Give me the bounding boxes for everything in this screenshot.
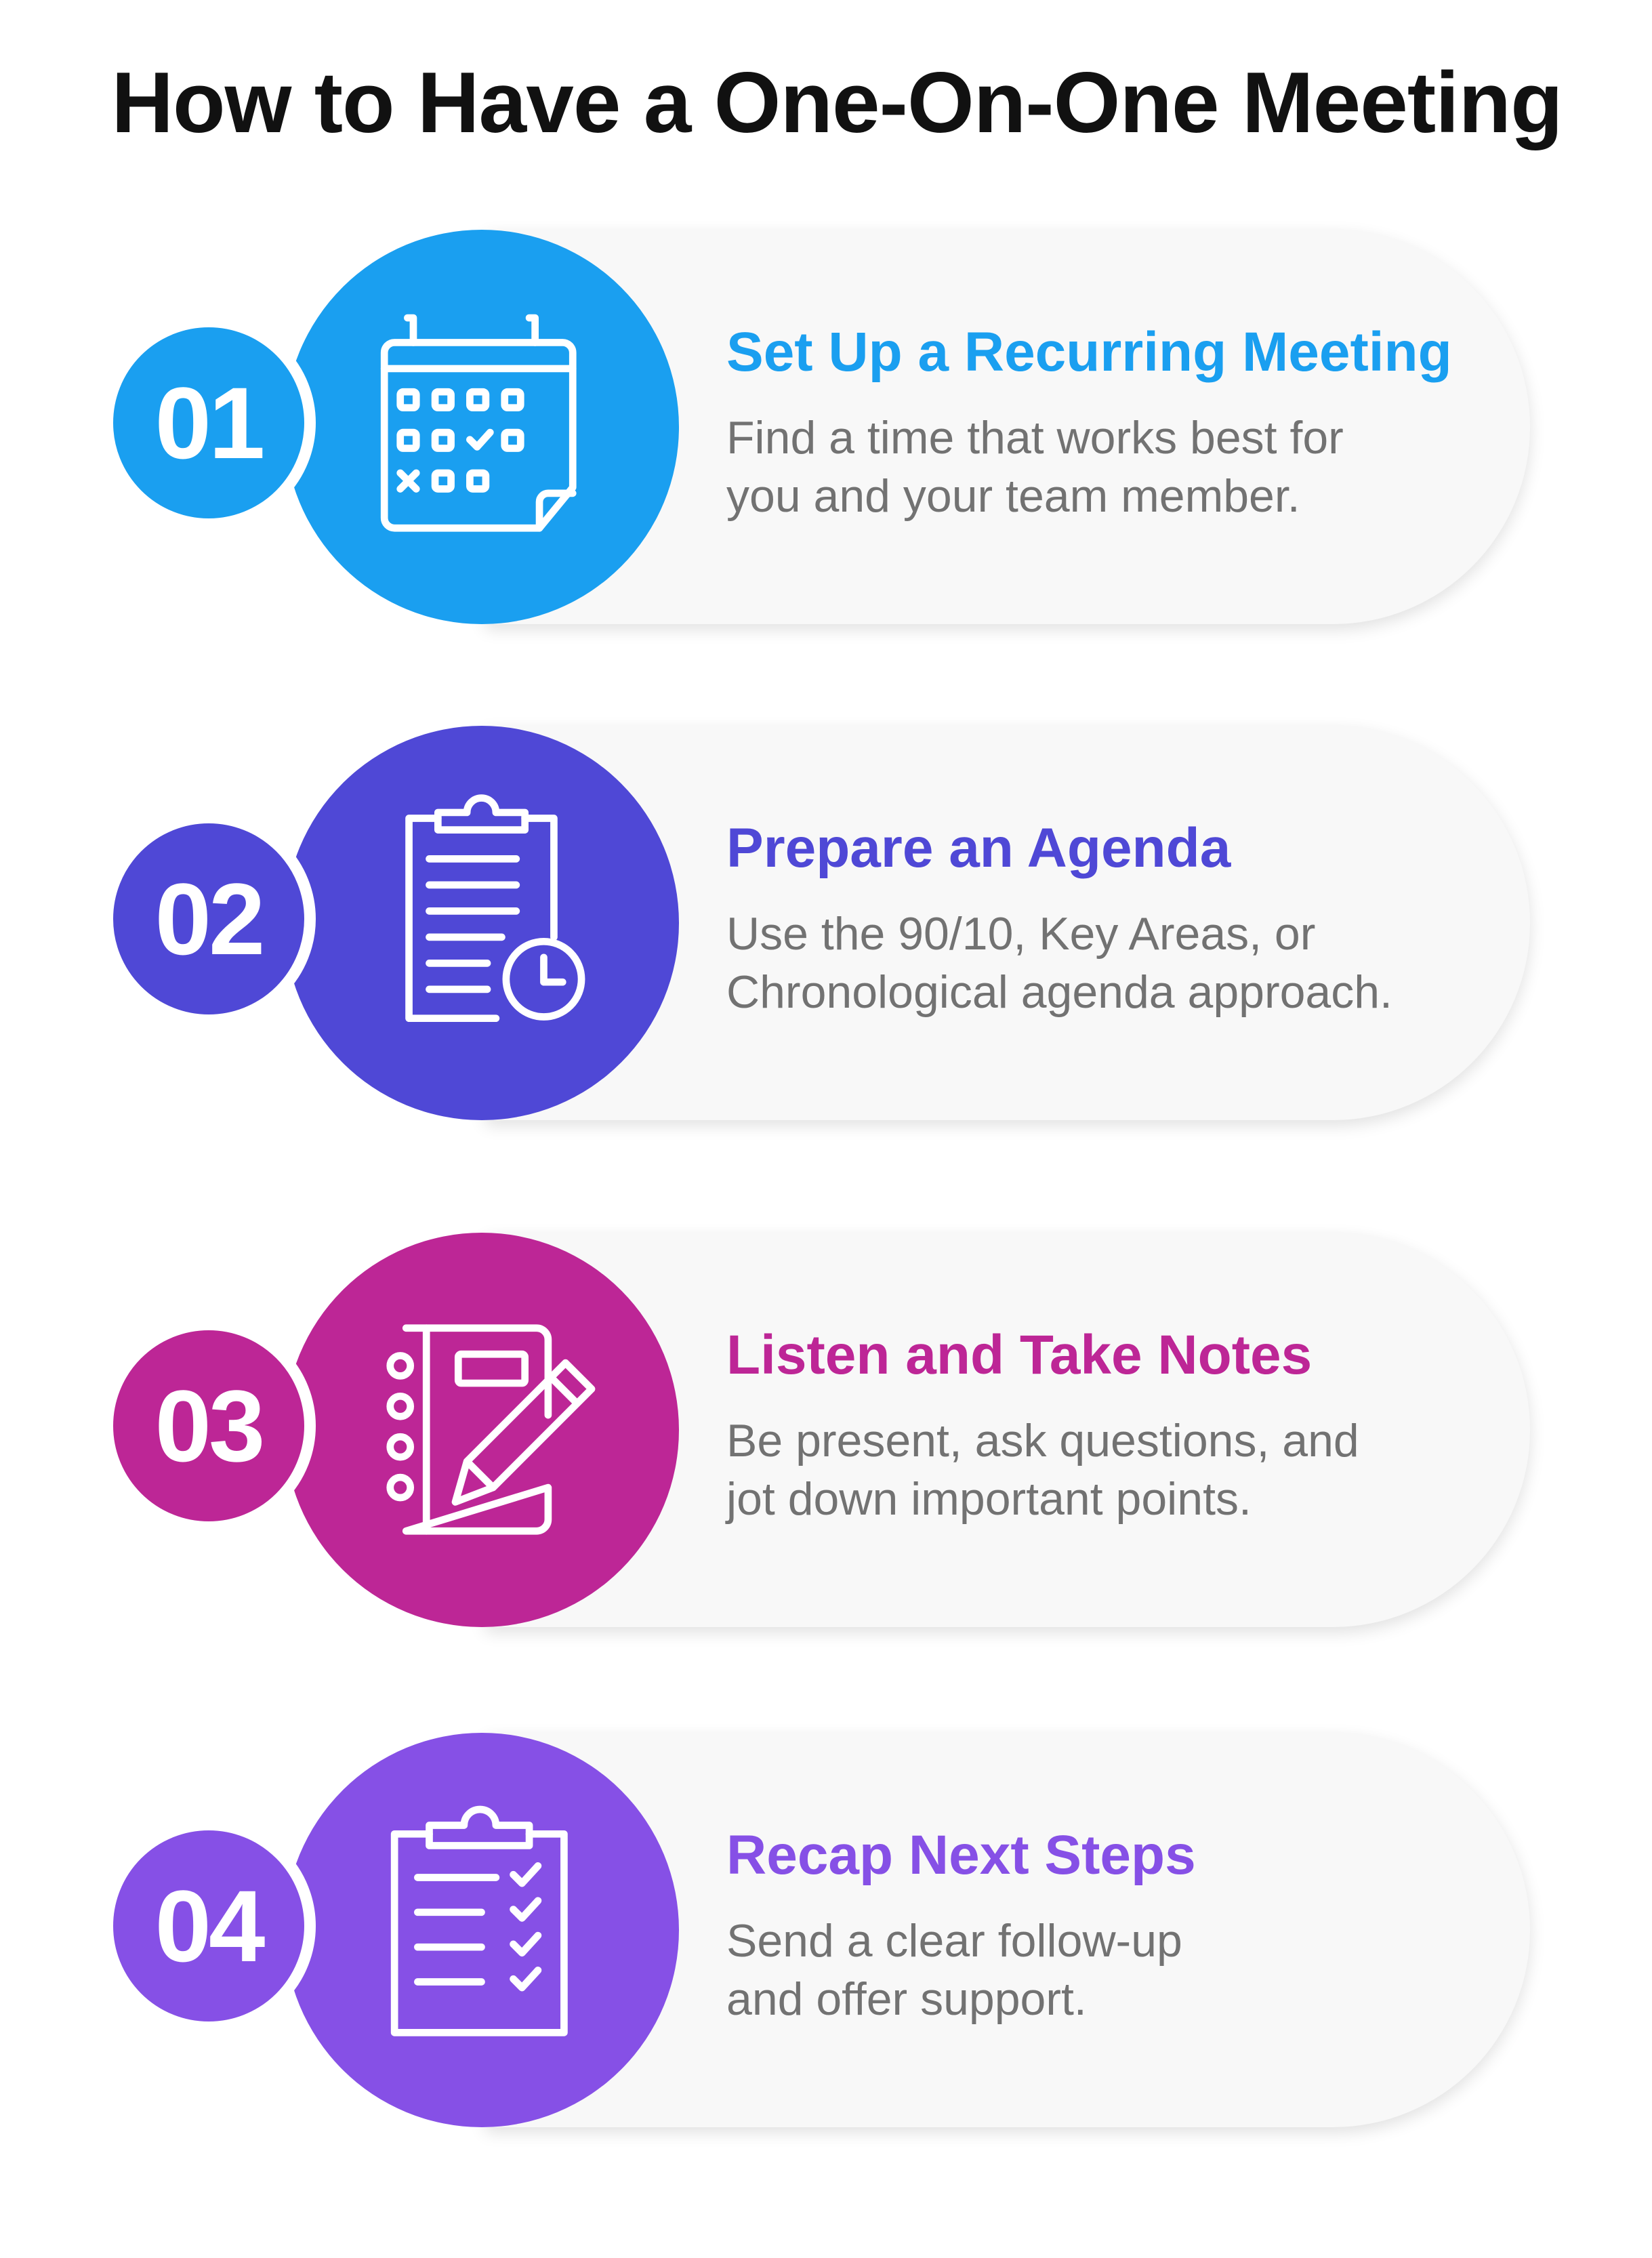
icon: clipboard with clock xyxy=(405,794,585,1022)
description: Send a clear follow-up xyxy=(726,1915,1182,1967)
heading: Set Up a Recurring Meeting xyxy=(726,321,1452,383)
description: Be present, ask questions, and xyxy=(726,1415,1359,1466)
description: and offer support. xyxy=(726,1973,1087,2025)
step 2 xyxy=(113,726,1534,1130)
pill background xyxy=(485,230,1530,624)
heading: Prepare an Agenda xyxy=(726,817,1231,879)
description xyxy=(726,908,1392,1018)
big circle xyxy=(285,1733,679,2127)
number badge: 01 xyxy=(155,366,262,480)
step 1 xyxy=(113,230,1534,634)
heading: Recap Next Steps xyxy=(726,1824,1196,1886)
big circle xyxy=(285,230,679,624)
step 3 xyxy=(113,1233,1534,1637)
icon: checklist clipboard xyxy=(390,1805,568,2036)
icon: notebook and pencil xyxy=(386,1324,595,1535)
pill background xyxy=(485,1233,1530,1627)
step 4 xyxy=(113,1733,1534,2137)
pill background xyxy=(485,1733,1530,2127)
title: How to Have a One-On-One Meeting xyxy=(111,54,1563,150)
number badge xyxy=(102,812,316,1026)
heading: Listen and Take Notes xyxy=(726,1324,1312,1386)
number badge: 04 xyxy=(155,1869,262,1983)
number badge xyxy=(102,1319,316,1533)
big circle xyxy=(285,1233,679,1627)
icon: calendar xyxy=(381,314,577,532)
description xyxy=(725,1415,1359,1525)
description: you and your team member. xyxy=(726,470,1300,522)
description: Chronological agenda approach. xyxy=(726,966,1392,1018)
pill background xyxy=(485,726,1530,1120)
description: Find a time that works best for xyxy=(726,412,1344,464)
description: jot down important points. xyxy=(726,1473,1252,1525)
description xyxy=(726,412,1344,522)
number badge: 03 xyxy=(155,1369,262,1483)
description: Use the 90/10, Key Areas, or xyxy=(726,908,1315,960)
number badge xyxy=(102,316,316,530)
number badge xyxy=(102,1819,316,2033)
description xyxy=(726,1915,1182,2025)
big circle xyxy=(285,726,679,1120)
number badge: 02 xyxy=(155,862,262,976)
